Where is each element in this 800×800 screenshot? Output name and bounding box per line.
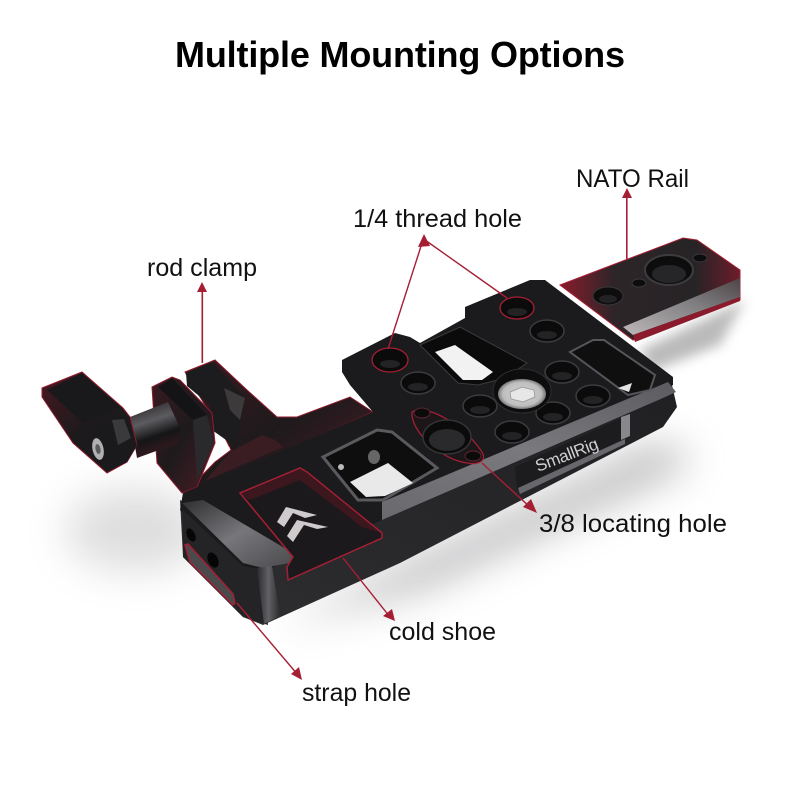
middle jaw bbox=[152, 377, 215, 493]
plate top surface bbox=[180, 280, 673, 572]
label: strap hole: strap hole bbox=[302, 679, 411, 707]
plate side face bbox=[180, 385, 677, 625]
3/8 locating hole bbox=[412, 408, 484, 464]
SmallRig badge bbox=[515, 414, 630, 494]
arrow: NATO Rail bbox=[622, 188, 632, 260]
chevrons logo bbox=[277, 507, 328, 542]
strap hole highlight bbox=[185, 544, 235, 605]
label: 1/4 thread hole: 1/4 thread hole bbox=[353, 205, 522, 233]
arrow: 3/8 locating hole bbox=[482, 463, 537, 513]
SmallRig badge: SmallRig bbox=[533, 434, 601, 476]
left square window bbox=[323, 430, 437, 500]
clamp arm bbox=[183, 360, 373, 495]
centre bolt bbox=[493, 369, 551, 413]
centre slot bbox=[420, 327, 527, 385]
right window bbox=[570, 340, 655, 395]
see-through gap bbox=[217, 437, 230, 460]
drop shadows bbox=[65, 300, 745, 625]
arrows: 1/4 thread hole bbox=[388, 234, 507, 349]
lever bbox=[42, 372, 137, 473]
NATO rail bbox=[560, 238, 740, 342]
title: Multiple Mounting Options bbox=[175, 34, 625, 75]
1/4 thread hole rings bbox=[372, 297, 534, 372]
bevel rim front bbox=[382, 382, 676, 520]
arrow: rod clamp bbox=[197, 282, 207, 363]
label: 3/8 locating hole: 3/8 locating hole bbox=[539, 510, 727, 538]
main mounting plate bbox=[180, 280, 677, 625]
arrow: strap hole bbox=[237, 603, 302, 680]
rail bevel bbox=[623, 278, 740, 335]
rear jaw bbox=[186, 362, 245, 447]
bolt cylinder bbox=[130, 402, 181, 458]
front corner block bbox=[182, 500, 293, 625]
rail holes bbox=[593, 254, 707, 305]
arrow: cold shoe bbox=[343, 558, 395, 621]
lever knob bbox=[92, 417, 137, 472]
label: cold shoe: cold shoe bbox=[389, 618, 496, 646]
cold shoe highlight bbox=[240, 468, 382, 580]
label: rod clamp: rod clamp bbox=[147, 254, 257, 282]
label: NATO Rail: NATO Rail bbox=[576, 165, 689, 193]
threaded holes bbox=[401, 320, 610, 443]
rod clamp bbox=[42, 360, 373, 495]
front face holes bbox=[184, 527, 221, 569]
